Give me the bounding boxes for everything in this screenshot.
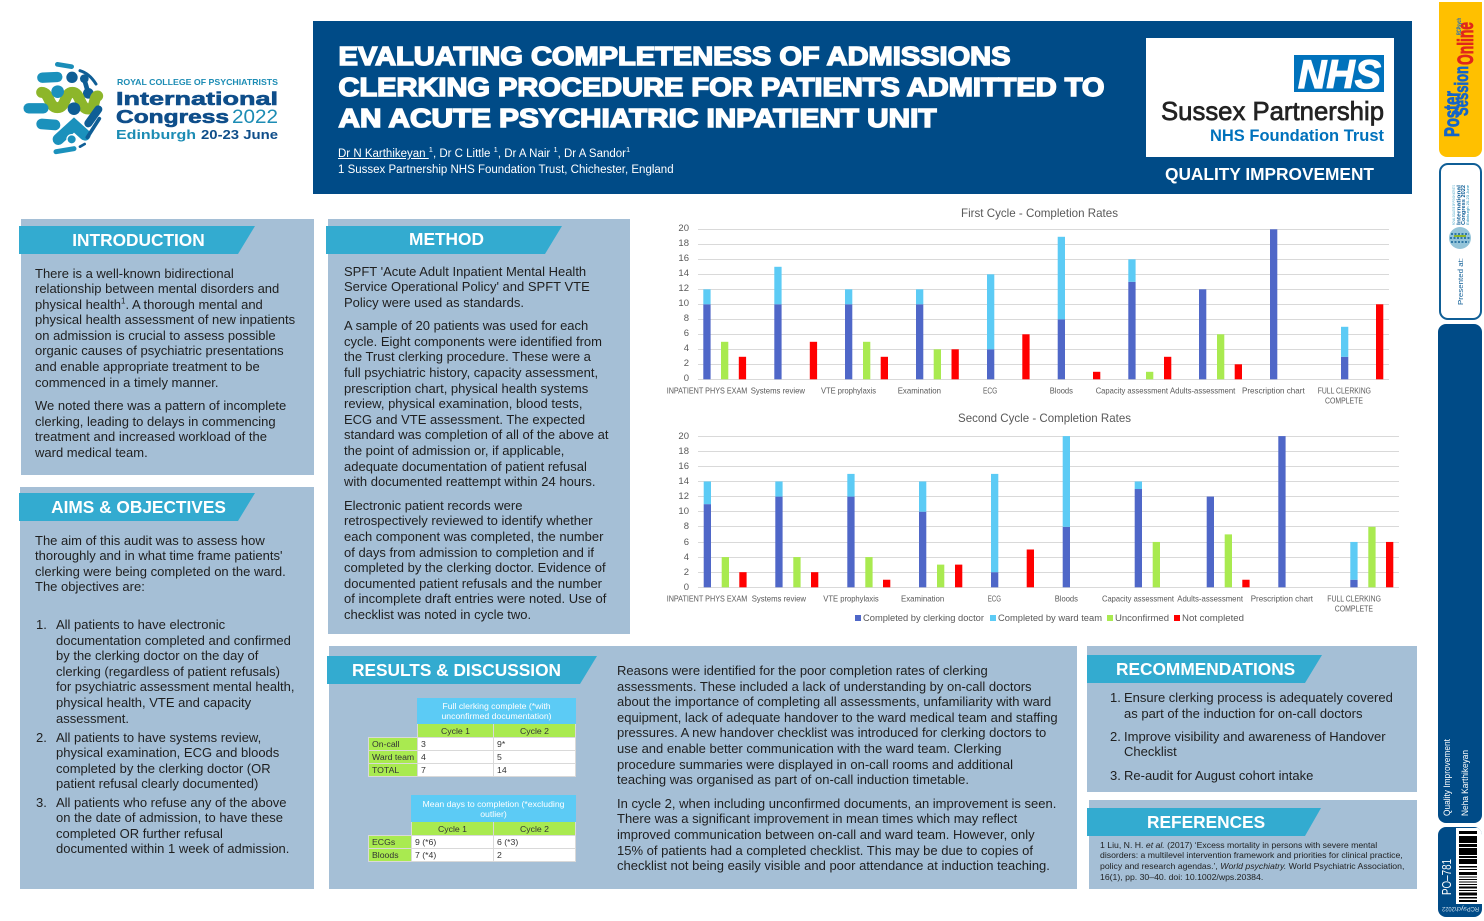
logo wordmark: International (116, 88, 278, 109)
logo: International Congress 2022 (24, 62, 278, 154)
list: objectives: on the date of admission, to have these (56, 810, 283, 825)
category labels: Adults-assessment (1177, 594, 1244, 604)
table: full clerking complete: 3 (421, 739, 426, 749)
text: method (344, 264, 608, 622)
title: AN ACUTE PSYCHIATRIC INPATIENT UNIT (338, 103, 937, 133)
authors and affiliation: 1 Sussex Partnership NHS Foundation Trust, Chichester, England (338, 164, 674, 176)
category labels: COMPLETE (1325, 396, 1363, 406)
category labels: Bloods (1050, 386, 1073, 396)
category labels: Prescription chart (1242, 386, 1305, 396)
text: introduction: commenced in a timely manner. We noted there was a pattern of incomplete (35, 375, 286, 413)
side tab: author details: Neha Karthikeyan (1460, 750, 1470, 816)
heading: aims and objectives: AIMS & OBJECTIVES (51, 497, 226, 517)
list: objectives: patient refusal clearly documented) (56, 776, 258, 791)
text: aims: The objectives are: (35, 579, 145, 594)
text: method: SPFT 'Acute Adult Inpatient Mental Health (344, 264, 586, 278)
chart title: Second Cycle - Completion Rates (958, 411, 1131, 425)
y axis labels: 18 (678, 446, 689, 457)
text: discussion: There was a significant improvement in mean times which may reflect (617, 811, 1017, 826)
category labels: Bloods (1055, 594, 1078, 604)
logo wordmark (116, 77, 278, 142)
heading: results and discussion: RESULTS & DISCUSSION (352, 660, 561, 680)
text: introduction: physical health1. A thorough mental and (35, 296, 263, 312)
text: introduction: organic causes of psychiatric presentations (35, 343, 284, 358)
text: introduction: clerking, leading to delays in commencing (35, 414, 276, 429)
category labels: Adults-assessment (1170, 386, 1236, 396)
y axis labels: 6 (684, 537, 689, 548)
text: method: of incomplete draft entries were noted. Use of (344, 591, 606, 606)
y axis labels: 20 (678, 223, 689, 234)
list: objectives: documentation completed and confirmed (56, 633, 291, 648)
text: discussion: 15% of patients had a completed checklist. This may be due to copies of (617, 843, 1033, 858)
text: aims: The aim of this audit was to assess how (35, 532, 265, 548)
list: objectives: All patients to have electronic (56, 617, 225, 632)
text: method: review, physical examination, blood tests, (344, 396, 582, 411)
side tab: author details: Quality Improvement (1442, 739, 1452, 816)
category labels: Examination (901, 594, 945, 604)
heading: references: REFERENCES (1147, 812, 1265, 832)
text: method: ECG and VTE assessment. The expected (344, 412, 585, 427)
conference code: RCPsych2022 (1441, 905, 1479, 911)
legend: Completed by clerking doctor (863, 613, 984, 623)
list: objectives: physical health, VTE and capacity (56, 695, 251, 710)
text: method: documented patient refusals and the number (344, 576, 602, 591)
text: discussion: checklist not being easily visible and poor attendance at induction teaching. (617, 858, 1050, 873)
text: method: adequate documentation of patient refusal (344, 459, 587, 474)
side tab: poster number and barcode (1438, 827, 1482, 917)
table: mean days to completion: Bloods (372, 850, 399, 860)
text: discussion: assessments. These included a lack of understanding by on-call doctors (617, 679, 1032, 694)
category labels: INPATIENT PHYS EXAM (667, 594, 747, 604)
objective 3 (36, 794, 289, 856)
chart title: First Cycle - Completion Rates (961, 206, 1118, 220)
objective 1: 1. (36, 617, 47, 632)
text: method: the point of admission or, if applicable, (344, 443, 564, 458)
y axis labels: 16 (678, 461, 689, 472)
NHS lozenge: NHS (1298, 53, 1381, 97)
y axis labels: 10 (678, 506, 689, 517)
bar chart: second cycle completion rates (667, 411, 1399, 623)
category labels: ECG (988, 594, 1001, 604)
list: objectives: documented within 1 week of admission. (56, 841, 289, 856)
title: EVALUATING COMPLETENESS OF ADMISSIONS (338, 41, 1010, 71)
panel: aims and objectives (20, 487, 314, 889)
barcode (1456, 828, 1482, 904)
category labels (667, 594, 1381, 614)
text: introduction: treatment and increased workload of the (35, 429, 267, 444)
text: method: of days from admission to completion and if (344, 545, 594, 560)
text: method: Service Operational Policy' and SPFT VTE (344, 279, 590, 294)
text: method: each component was completed, the number (344, 529, 603, 544)
side tab: poster session online: RCPsych (1456, 18, 1463, 35)
list: objectives: clerking (regardless of patient refusals) (56, 664, 280, 679)
objective 2: 2. (36, 730, 47, 744)
authors and affiliation (338, 145, 674, 176)
logo wordmark: 2022 (232, 107, 278, 128)
list: recommendations: Ensure clerking process is adequately covered (1124, 690, 1393, 705)
side tab: presented at: Edinburgh 20-23 June (1466, 185, 1470, 225)
legend: Completed by ward team (998, 613, 1102, 623)
panel: introduction (21, 219, 314, 475)
text: discussion: procedure summaries were displayed in on-call rooms and additional (617, 757, 1013, 772)
y axis labels: 0 (684, 582, 689, 593)
side tab: poster session online: Poster (1441, 91, 1464, 137)
text: references: policy and research agendas.’, World psychiatry. World Psychiatric Association, (1100, 861, 1404, 871)
text: method: cycle. Eight components were identified from (344, 334, 602, 349)
category labels: FULL CLERKING (1318, 386, 1371, 396)
category labels (667, 386, 1371, 406)
NHS lozenge: NHS Foundation Trust (1210, 126, 1384, 145)
heading: method (326, 226, 562, 254)
y axis labels: 18 (678, 238, 689, 249)
text: discussion: improved communication between on-call and ward team. However, only (617, 827, 1035, 842)
list: objectives: by the clerking doctor on the day of (56, 648, 258, 663)
y axis labels: 0 (684, 373, 689, 384)
text: introduction: There is a well-known bidirectional (35, 266, 234, 280)
panel: recommendations (1087, 646, 1417, 792)
icon: congress molecule globe (29, 64, 99, 152)
table: full clerking complete: Ward team (372, 752, 414, 762)
table: mean days to completion: Mean days to completion (*excluding outlier) (423, 798, 564, 818)
y axis labels: 8 (684, 313, 689, 324)
table: full clerking complete: 7 (421, 765, 426, 775)
y axis labels (678, 223, 689, 384)
category labels: VTE prophylaxis (821, 386, 876, 396)
bars (703, 229, 1383, 379)
side tab: presented at: International (1456, 184, 1462, 225)
list: recommendations: Re-audit for August cohort intake (1124, 768, 1313, 783)
logo wordmark: Congress (116, 106, 229, 127)
category labels: COMPLETE (1335, 604, 1373, 614)
text: discussion: equipment, lack of adequate handover to the ward medical team and staffing (617, 710, 1058, 725)
table: mean days to completion: 9 (*6) (415, 837, 436, 847)
table: full clerking complete: 5 (497, 752, 502, 762)
heading: references (1087, 808, 1321, 836)
table: mean days to completion: 6 (*3) (497, 837, 518, 847)
y axis labels: 8 (684, 521, 689, 532)
heading: method: METHOD (409, 229, 484, 249)
category labels: Prescription chart (1251, 594, 1314, 604)
recommendation 1: 1. (1110, 690, 1121, 705)
logo wordmark: 20-23 June (201, 128, 278, 142)
legend (855, 613, 1244, 623)
recommendation 3: 3. (1110, 768, 1121, 783)
table: mean days to completion: ECGs (372, 837, 395, 847)
category labels: INPATIENT PHYS EXAM (667, 386, 747, 396)
list: recommendations: Improve visibility and awareness of Handover (1124, 728, 1386, 744)
table: full clerking complete (368, 698, 576, 777)
y axis labels: 20 (678, 431, 689, 442)
heading: results and discussion (327, 656, 597, 684)
panel: references (1089, 800, 1417, 889)
y axis labels: 16 (678, 253, 689, 264)
objective 2 (36, 730, 279, 791)
text: discussion: Reasons were identified for the poor completion rates of clerking (617, 663, 988, 678)
text: discussion (617, 663, 1058, 873)
table: full clerking complete: Full clerking complete (*with unconfirmed documentation) (441, 701, 552, 721)
y axis labels: 6 (684, 328, 689, 339)
table: full clerking complete: TOTAL (372, 765, 399, 775)
table: full clerking complete: Cycle 1 (441, 726, 470, 736)
text: introduction: physical health assessment of new inpatients (35, 312, 295, 327)
table: mean days to completion: Cycle 1 (438, 824, 467, 834)
text: introduction: relationship between mental disorders and (35, 281, 279, 296)
text: references: disorders: a multilevel intervention framework and priorities for clinical practice, (1100, 850, 1403, 860)
side tab: presented at: ROYAL COLLEGE OF PSYCHIATRISTS (1452, 185, 1456, 225)
title: CLERKING PROCEDURE FOR PATIENTS ADMITTED TO (338, 72, 1104, 102)
bars (704, 436, 1393, 587)
NHS lozenge (1161, 53, 1384, 145)
text: method: retrospectively reviewed to identify whether (344, 513, 593, 528)
category labels: VTE prophylaxis (823, 594, 879, 604)
heading: introduction: INTRODUCTION (72, 230, 205, 250)
panel: method (328, 219, 630, 634)
y axis labels: 4 (684, 343, 689, 354)
table: mean days to completion (368, 795, 576, 862)
heading: aims and objectives (19, 493, 255, 521)
NHS logo box (1146, 38, 1394, 157)
side tab: presented at: Presented at: (1456, 258, 1465, 305)
text: method: standard was completion of all of the above at (344, 427, 608, 442)
side tab: author details (1438, 324, 1482, 823)
text: aims: clerking were being completed on the ward. (35, 564, 286, 579)
text: method: full psychiatric history, capacity assessment, (344, 365, 598, 380)
table: mean days to completion: Cycle 2 (520, 824, 549, 834)
legend: Unconfirmed (1115, 613, 1169, 623)
y axis labels: 12 (678, 283, 689, 294)
recommendation 2 (1110, 728, 1386, 759)
table: full clerking complete: On-call (372, 739, 400, 749)
list: objectives: completed by the clerking doctor (OR (56, 761, 271, 776)
logo wordmark: ROYAL COLLEGE OF PSYCHIATRISTS (117, 77, 278, 87)
heading: recommendations: RECOMMENDATIONS (1116, 659, 1295, 679)
table: mean days to completion: 7 (*4) (415, 850, 436, 860)
text: discussion: pressures. A new handover checklist was introduced for clerking doctors to (617, 725, 1046, 740)
poster number: PO–781 (1440, 859, 1454, 895)
list: objectives: All patients who refuse any of the above (56, 794, 287, 810)
text: method: the Trust clerking procedure. These were a (344, 349, 591, 364)
table: full clerking complete: 9* (497, 739, 505, 749)
list: objectives: for psychiatric assessment mental health, (56, 679, 294, 694)
y axis labels: 4 (684, 552, 689, 563)
recommendation 3 (1110, 768, 1313, 783)
list: recommendations: as part of the induction for on-call doctors (1124, 706, 1362, 721)
heading: recommendations (1087, 655, 1322, 683)
y axis labels (678, 431, 689, 593)
text: references: 1 Liu, N. H. et al. (2017) ‘Excess mortality in persons with severe mental (1100, 840, 1377, 850)
NHS lozenge: Sussex Partnership (1161, 96, 1384, 126)
text: introduction (35, 266, 295, 460)
text: introduction: and enable appropriate treatment to be (35, 359, 260, 374)
recommendation 1 (1110, 690, 1393, 721)
legend: Not completed (1182, 613, 1244, 623)
header banner (313, 21, 1412, 194)
objective 3: 3. (36, 794, 47, 810)
category labels: Capacity assessment (1102, 594, 1175, 604)
heading: introduction (19, 226, 255, 254)
recommendation 2: 2. (1110, 728, 1121, 744)
text: aims: thoroughly and in what time frame patients' (35, 548, 282, 563)
category labels: Examination (898, 386, 941, 396)
category labels: Systems review (751, 386, 806, 396)
y axis labels: 2 (684, 358, 689, 369)
text: discussion: teaching was organised as part of on-call induction timetable. In cycle 2, when including unconfirmed documents, an improvement is seen. (617, 772, 1056, 811)
category labels: ECG (983, 386, 997, 396)
authors and affiliation: Dr N Karthikeyan 1, Dr C Little 1, Dr A Nair 1, Dr A Sandor1 (338, 145, 630, 160)
text: method: prescription chart, physical health systems (344, 381, 588, 396)
list: recommendations: Checklist (1124, 744, 1177, 759)
category labels: FULL CLERKING (1327, 594, 1381, 604)
bar chart: first cycle completion rates (667, 206, 1389, 406)
y axis labels: 14 (678, 476, 689, 487)
list: recommendations (1110, 690, 1393, 783)
text: aims (35, 532, 286, 594)
text: method: Policy were used as standards. A sample of 20 patients was used for each (344, 295, 588, 333)
table: mean days to completion: 2 (497, 850, 502, 860)
panel: results and discussion (329, 646, 1077, 889)
side tab: presented at: Congress 2022 (1461, 185, 1467, 225)
text: discussion: about the importance of completing all assessments, unfamiliarity with ward (617, 694, 1051, 709)
list: objectives (36, 617, 294, 856)
text: method: completed by the clerking doctor. Evidence of (344, 560, 606, 575)
objective 1 (36, 617, 294, 726)
text: references: 16(1), pp. 30–40. doi: 10.1002/wps.20384. (1100, 872, 1263, 882)
list: objectives: All patients to have systems review, (56, 730, 261, 744)
y axis labels: 12 (678, 491, 689, 502)
list: objectives: physical examination, ECG and bloods (56, 745, 279, 760)
table: full clerking complete: 4 (421, 752, 426, 762)
text: references (1100, 840, 1404, 882)
side tab: poster session online (1439, 2, 1482, 157)
text: method: with documented reattempt within 24 hours. Electronic patient records were (344, 474, 595, 513)
logo wordmark: Edinburgh (116, 128, 196, 142)
category label: QUALITY IMPROVEMENT (1165, 164, 1374, 184)
y axis labels: 2 (684, 567, 689, 578)
y axis labels: 10 (678, 298, 689, 309)
side tab: poster session online: Session (1452, 66, 1473, 116)
text: discussion: use and enable better communication with the ward team. Clerking (617, 741, 1001, 756)
title (338, 41, 1104, 133)
side tab: presented at (1439, 163, 1482, 320)
category labels: Capacity assessment (1096, 386, 1169, 396)
list: objectives: assessment. (56, 711, 129, 726)
table: full clerking complete: Cycle 2 (520, 726, 549, 736)
text: introduction: on admission is crucial to assess possible (35, 328, 276, 343)
table: full clerking complete: 14 (497, 765, 507, 775)
y axis labels: 14 (678, 268, 689, 279)
text: method: checklist was noted in cycle two. (344, 607, 531, 622)
list: objectives: completed OR further refusal (56, 826, 223, 841)
text: introduction: ward medical team. (35, 445, 148, 460)
category labels: Systems review (752, 594, 807, 604)
